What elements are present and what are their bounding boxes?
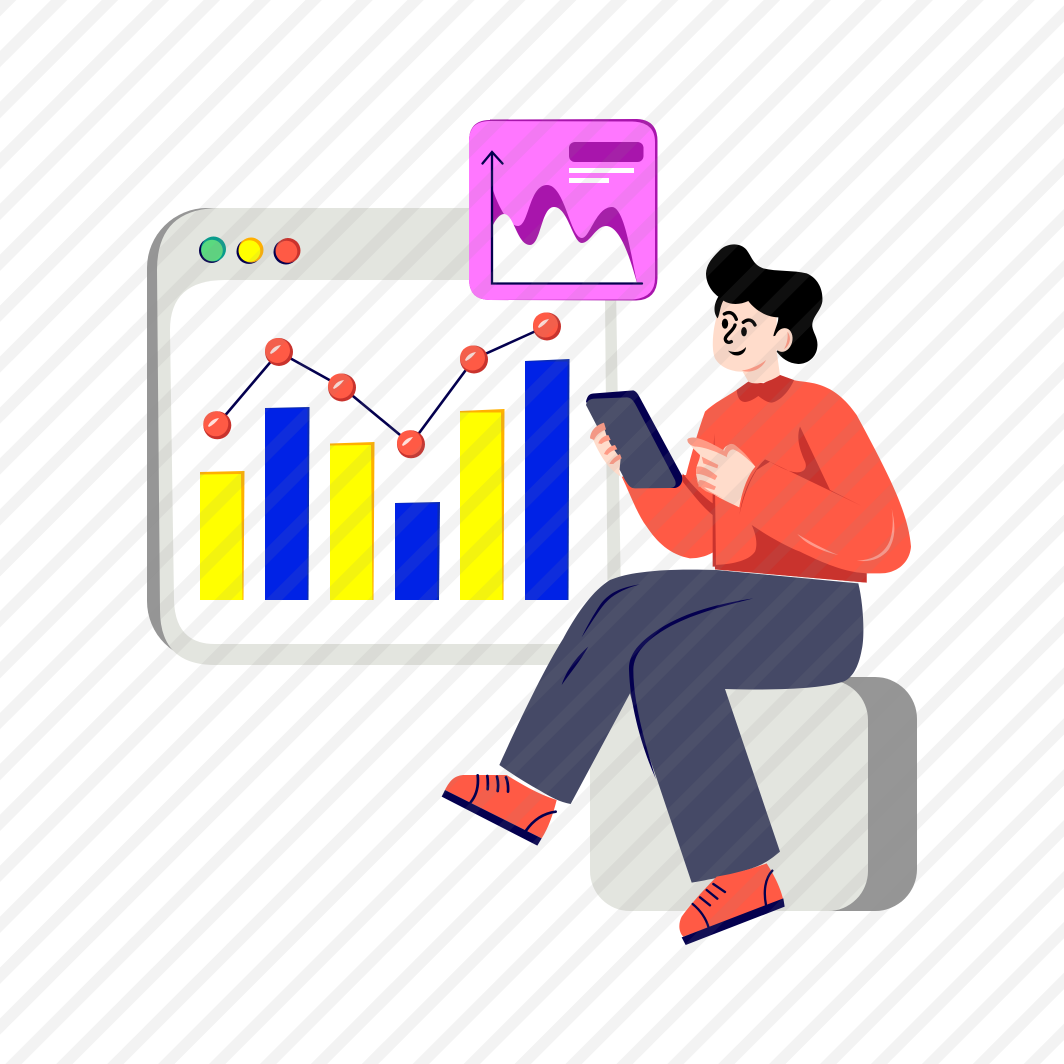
browser window <box>147 208 621 665</box>
sleeve highlights <box>797 508 894 561</box>
right shoe <box>679 863 785 945</box>
left hand holding tablet <box>590 423 622 477</box>
seat block <box>590 677 917 911</box>
window control: green <box>199 236 226 263</box>
collar <box>737 375 794 403</box>
window control: red <box>274 238 300 264</box>
sweater body <box>622 375 911 583</box>
marker 6 <box>533 312 561 340</box>
neck and face <box>713 300 780 383</box>
sleeve cuff <box>739 459 770 515</box>
bar 4 <box>395 502 440 600</box>
bar 5 <box>460 409 504 600</box>
eyes <box>722 319 747 336</box>
bar 2 <box>265 407 310 600</box>
front area series <box>493 207 637 283</box>
bar 1 <box>200 471 244 600</box>
sweater shadow: side seam <box>713 433 716 567</box>
ear <box>772 326 795 354</box>
bar 6 <box>525 359 570 600</box>
marker 3 <box>328 374 356 402</box>
torso and arms <box>622 375 911 583</box>
marker 1 <box>203 411 231 439</box>
head and neck <box>706 244 822 383</box>
floating area chart card <box>469 119 658 300</box>
mouth <box>728 347 746 356</box>
sweater shadow: hem <box>715 525 867 583</box>
trousers <box>499 570 863 883</box>
pointing hand <box>687 438 755 507</box>
marker 4 <box>397 430 425 458</box>
back area series <box>493 185 637 282</box>
bar 3 <box>330 442 374 600</box>
hair <box>706 244 822 364</box>
bar chart <box>200 359 570 600</box>
legend text lines <box>569 168 634 183</box>
sweater shadow: elbow fold <box>765 427 862 506</box>
sweater shadow: under arm <box>683 473 715 517</box>
chin shadow <box>742 360 766 372</box>
person <box>442 244 911 945</box>
marker 2 <box>265 338 293 366</box>
title placeholder bar <box>569 142 644 162</box>
tablet <box>586 390 682 488</box>
nose <box>725 325 735 342</box>
card background <box>469 119 658 300</box>
eyebrows <box>724 313 755 325</box>
line chart with markers <box>203 312 561 458</box>
chart axes with arrow <box>482 152 642 284</box>
window control: yellow <box>236 238 264 264</box>
marker 5 <box>460 346 488 374</box>
left shoe <box>442 775 557 846</box>
